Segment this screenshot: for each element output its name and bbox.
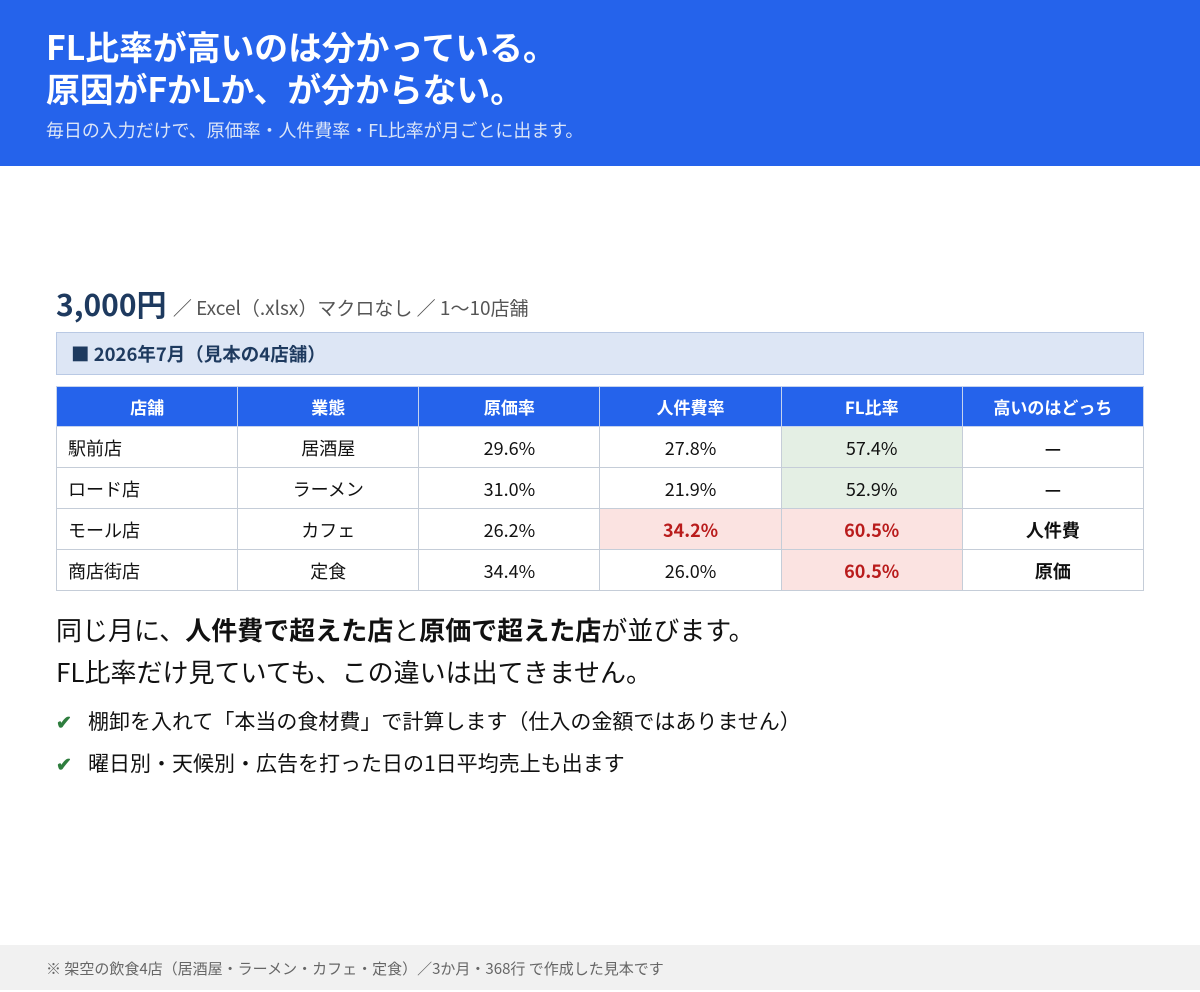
data table: 店舗 bbox=[130, 394, 164, 419]
sample period bar: ■ 2026年7月（見本の4店舗） bbox=[71, 341, 326, 367]
data table: 21.9% bbox=[665, 476, 716, 502]
title: 原因がFかLか、が分からない。 bbox=[46, 63, 524, 112]
data table: ラーメン bbox=[293, 476, 364, 502]
data table: 29.6% bbox=[484, 435, 535, 461]
data table: ロード店 bbox=[68, 476, 140, 502]
check item 2: 曜日別・天候別・広告を打った日の1日平均売上も出ます bbox=[88, 748, 625, 778]
data table: 27.8% bbox=[665, 435, 716, 461]
data table: 駅前店 bbox=[68, 435, 122, 461]
data table: 57.4% bbox=[846, 435, 897, 461]
data table: 商店街店 bbox=[68, 558, 140, 584]
data table: 原価率 bbox=[484, 394, 535, 419]
sample period bar bbox=[56, 332, 1144, 375]
footer note bbox=[0, 945, 1200, 990]
data table: 52.9% bbox=[846, 476, 897, 502]
data table bbox=[56, 386, 1144, 591]
data table: 60.5% bbox=[844, 558, 899, 584]
data table: 定食 bbox=[310, 558, 346, 584]
data table: 居酒屋 bbox=[301, 435, 355, 461]
key message bbox=[56, 611, 755, 690]
price line: 3,000円 ／ Excel（.xlsx）マクロなし ／ 1〜10店舗 bbox=[56, 281, 529, 325]
data table: 業態 bbox=[311, 394, 345, 419]
data table: 人件費率 bbox=[657, 394, 725, 419]
data table: 60.5% bbox=[844, 517, 899, 543]
data table: 人件費 bbox=[1026, 517, 1080, 543]
data table: 34.2% bbox=[663, 517, 718, 543]
data table: 31.0% bbox=[484, 476, 535, 502]
header band bbox=[0, 0, 1200, 166]
title: FL比率が高いのは分かっている。 bbox=[46, 21, 557, 70]
footer note: ※ 架空の飲食4店（居酒屋・ラーメン・カフェ・定食）／3か月・368行 で作成した見本です bbox=[46, 958, 664, 979]
data table: FL比率 bbox=[845, 394, 899, 419]
title bbox=[46, 21, 557, 112]
data table: 原価 bbox=[1035, 558, 1071, 584]
data table: 高いのはどっち bbox=[993, 394, 1112, 419]
data table: モール店 bbox=[68, 517, 140, 543]
subtitle: 毎日の入力だけで、原価率・人件費率・FL比率が月ごとに出ます。 bbox=[46, 117, 583, 143]
data table: カフェ bbox=[301, 517, 355, 543]
checklist bbox=[56, 706, 801, 778]
check item 1: 棚卸を入れて「本当の食材費」で計算します（仕入の金額ではありません） bbox=[88, 706, 801, 736]
check item 1: ✔ bbox=[56, 708, 72, 735]
data table: 34.4% bbox=[484, 558, 535, 584]
key message: FL比率だけ見ていても、この違いは出てきません。 bbox=[56, 653, 652, 690]
data table: — bbox=[1045, 435, 1061, 461]
data table: 26.0% bbox=[665, 558, 716, 584]
data table: 26.2% bbox=[484, 517, 535, 543]
key message: 同じ月に、人件費で超えた店と原価で超えた店が並びます。 bbox=[56, 611, 755, 648]
data table: — bbox=[1045, 476, 1061, 502]
check item 2: ✔ bbox=[56, 750, 72, 777]
